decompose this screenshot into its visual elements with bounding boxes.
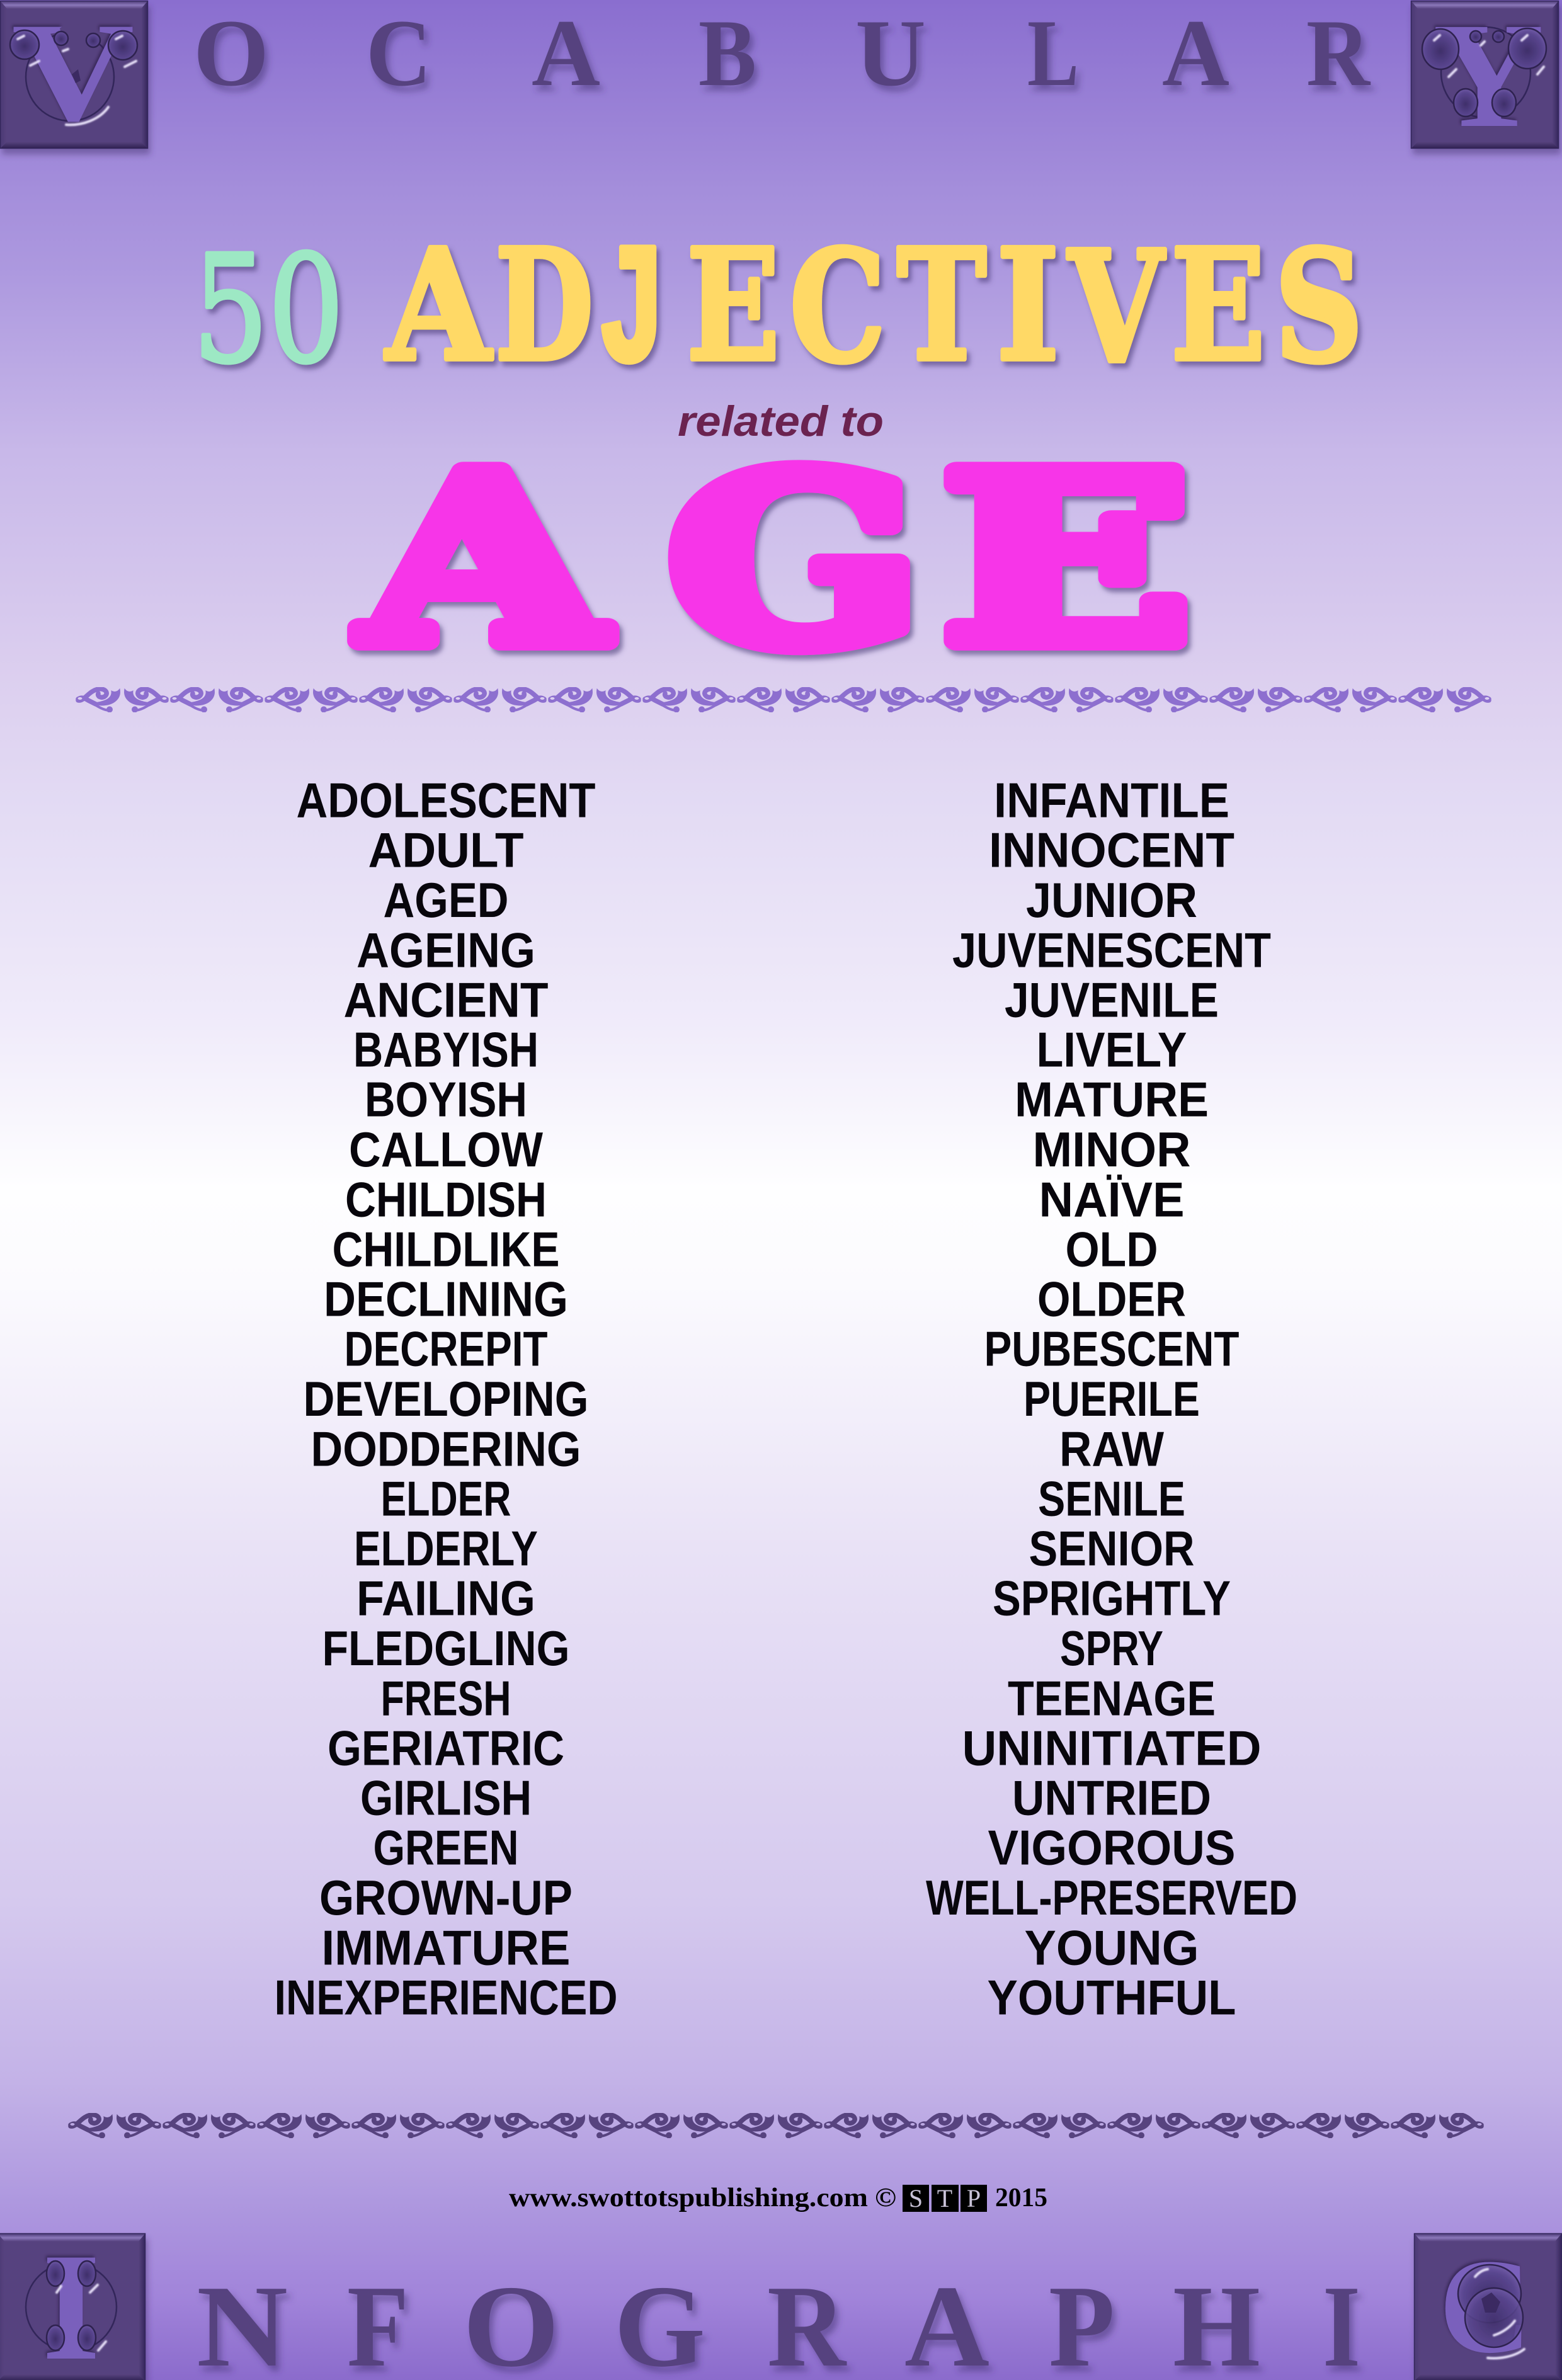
- tile: letter I: [0, 2221, 145, 2380]
- heading letters: OCABULAR: B: [698, 0, 756, 106]
- heading letters: OCABULAR: [193, 0, 1371, 106]
- word list: right column: JUVENESCENT: [952, 922, 1271, 977]
- word list: left column: ADULT: [368, 823, 524, 878]
- STP logo boxes: [903, 2184, 987, 2212]
- title: ADJECTIVES: E: [1171, 216, 1265, 396]
- word list: right column: YOUNG: [1024, 1920, 1199, 1975]
- word list: left column: FRESH: [380, 1670, 511, 1726]
- title: ADJECTIVES: E: [687, 216, 780, 396]
- word list: left column: ELDER: [380, 1471, 511, 1527]
- word list: left column: BOYISH: [365, 1072, 527, 1127]
- word list: right column: NAÏVE: [1039, 1171, 1184, 1227]
- word list: right column: TEENAGE: [1008, 1670, 1216, 1726]
- word list: right column: UNTRIED: [1012, 1770, 1211, 1825]
- title: AGE: [357, 423, 1191, 698]
- word list: left column: INEXPERIENCED: [275, 1970, 617, 2025]
- word list: right column: [926, 772, 1297, 2025]
- heading letters: OCABULAR: A: [1162, 0, 1229, 106]
- word list: left column: [275, 772, 617, 2025]
- word list: right column: VIGOROUS: [988, 1820, 1236, 1876]
- word list: left column: FLEDGLING: [322, 1620, 569, 1676]
- STP logo boxes: S: [909, 2184, 923, 2212]
- title: AGE: G: [668, 424, 921, 698]
- word list: left column: ADOLESCENT: [296, 772, 596, 828]
- word list: right column: SPRY: [1060, 1620, 1163, 1676]
- word list: right column: OLD: [1066, 1222, 1158, 1277]
- heading letters: OCABULAR: U: [855, 0, 926, 106]
- word list: left column: FAILING: [356, 1571, 535, 1626]
- heading letters: NFOGRAPHI: [197, 2262, 1360, 2380]
- title: ADJECTIVES: S: [1275, 217, 1363, 397]
- title: ADJECTIVES: V: [1067, 218, 1165, 397]
- word list: right column: UNINITIATED: [962, 1721, 1261, 1776]
- title: AGE: E: [942, 423, 1191, 697]
- word list: left column: DEVELOPING: [304, 1371, 588, 1426]
- word list: left column: DODDERING: [311, 1421, 581, 1476]
- tile: letter C: [1414, 2231, 1562, 2380]
- bottom banner: INFOGRAPHIC: [0, 2221, 1562, 2380]
- title: ADJECTIVES: D: [495, 216, 593, 396]
- title: ADJECTIVES: A: [385, 216, 493, 396]
- word list: left column: GERIATRIC: [328, 1721, 564, 1776]
- word list: left column: ANCIENT: [344, 972, 548, 1028]
- title: ADJECTIVES: J: [597, 218, 666, 412]
- upper ornamental divider: [75, 687, 1492, 712]
- word list: right column: SPRIGHTLY: [993, 1571, 1231, 1626]
- footer credit: 2015: [995, 2184, 1047, 2212]
- word list: right column: MATURE: [1015, 1072, 1209, 1127]
- title: ADJECTIVES: I: [996, 216, 1059, 396]
- word list: right column: MINOR: [1033, 1122, 1190, 1177]
- heading letters: OCABULAR: C: [366, 0, 431, 106]
- word list: left column: GIRLISH: [360, 1770, 532, 1825]
- STP logo boxes: T: [937, 2184, 952, 2212]
- word list: right column: SENILE: [1038, 1471, 1185, 1527]
- word list: left column: GROWN-UP: [319, 1870, 573, 1925]
- word list: right column: INFANTILE: [994, 772, 1229, 828]
- word list: left column: CALLOW: [349, 1122, 543, 1177]
- word list: right column: YOUTHFUL: [988, 1970, 1236, 2025]
- tile: letter C: C: [1439, 2231, 1531, 2380]
- word list: right column: LIVELY: [1037, 1022, 1187, 1077]
- footer credit: ©: [875, 2184, 896, 2212]
- title: AGE: A: [357, 423, 610, 697]
- word list: left column: ELDERLY: [354, 1520, 538, 1576]
- word list: left column: BABYISH: [353, 1022, 539, 1077]
- word list: left column: CHILDISH: [345, 1171, 547, 1227]
- footer credit: www.swottotspublishing.com: [509, 2184, 868, 2212]
- word list: right column: RAW: [1059, 1421, 1164, 1476]
- word list: left column: GREEN: [373, 1820, 519, 1876]
- word list: right column: OLDER: [1037, 1271, 1186, 1326]
- heading letters: OCABULAR: L: [1027, 0, 1079, 106]
- title: 50: 50: [193, 224, 344, 396]
- heading letters: OCABULAR: A: [532, 0, 600, 106]
- STP logo boxes: P: [967, 2184, 981, 2212]
- lower ornamental divider: [67, 2113, 1485, 2138]
- word list: right column: SENIOR: [1029, 1520, 1194, 1576]
- word list: right column: JUNIOR: [1026, 872, 1197, 928]
- word list: left column: AGEING: [356, 922, 535, 977]
- heading letters: OCABULAR: O: [193, 0, 269, 106]
- tile: letter V: [0, 0, 148, 151]
- word list: right column: PUBESCENT: [984, 1321, 1240, 1377]
- word list: right column: INNOCENT: [989, 823, 1234, 878]
- footer credit: [509, 2184, 1047, 2212]
- subtitle: related to: related to: [678, 397, 884, 445]
- title: ADJECTIVES: T: [897, 216, 986, 396]
- word list: left column: AGED: [383, 872, 509, 928]
- word list: right column: WELL-PRESERVED: [926, 1870, 1297, 1925]
- title: ADJECTIVES: C: [790, 217, 886, 397]
- word list: right column: JUVENILE: [1005, 972, 1219, 1028]
- word list: left column: DECREPIT: [344, 1321, 548, 1377]
- title: ADJECTIVES: [385, 216, 1363, 412]
- word list: left column: IMMATURE: [321, 1920, 571, 1975]
- heading letters: OCABULAR: R: [1306, 0, 1371, 106]
- word list: left column: DECLINING: [324, 1271, 568, 1326]
- word list: left column: CHILDLIKE: [333, 1222, 559, 1277]
- top banner: VOCABULARY: [0, 0, 1559, 159]
- word list: right column: PUERILE: [1023, 1371, 1200, 1426]
